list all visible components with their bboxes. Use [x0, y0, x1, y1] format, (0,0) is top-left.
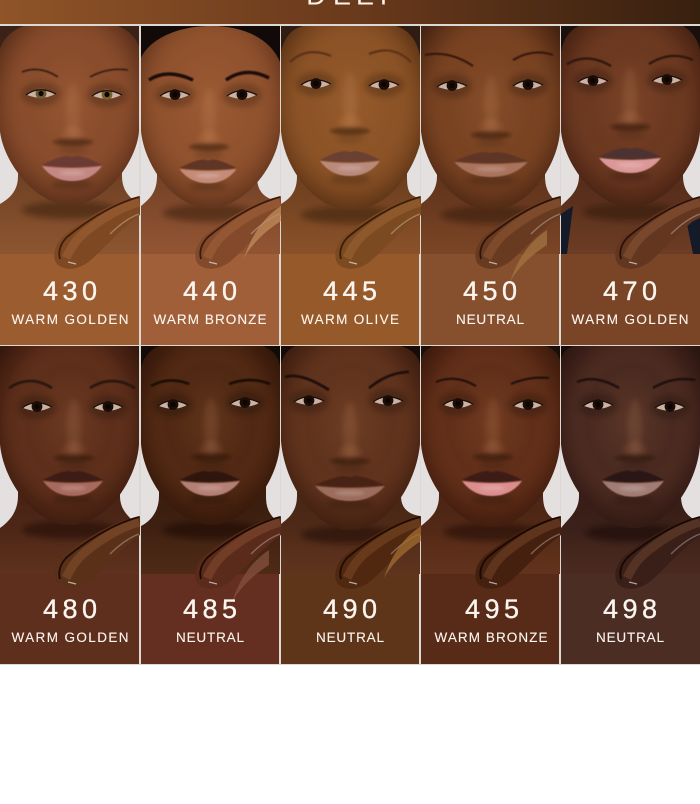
photo: model 430	[0, 26, 139, 254]
undertone label: WARM BRONZE	[434, 630, 548, 645]
photo: model 480	[0, 346, 139, 574]
panel: shade 440	[141, 26, 281, 345]
panel: shade 470	[561, 26, 700, 345]
panel: shade 445	[281, 26, 421, 345]
colour band	[421, 574, 559, 664]
colour band	[561, 254, 700, 345]
foundation swatch	[54, 196, 140, 269]
foundation swatch	[195, 196, 281, 269]
photo: model 490	[281, 346, 420, 574]
colour band	[0, 574, 139, 664]
panel: shade 430	[0, 26, 140, 345]
photo: model 445	[281, 26, 420, 254]
foundation swatch	[475, 516, 561, 589]
foundation swatch	[335, 516, 421, 589]
undertone label: WARM OLIVE	[301, 312, 399, 327]
undertone label: WARM GOLDEN	[12, 312, 128, 327]
undertone label: WARM BRONZE	[154, 312, 266, 327]
shade number: 480	[43, 594, 97, 624]
panel: shade 490	[281, 346, 421, 664]
foundation smear	[510, 230, 547, 282]
colour band	[281, 254, 419, 345]
header band	[0, 0, 700, 24]
foundation swatch	[615, 516, 700, 589]
panel: shade 498	[561, 346, 700, 664]
panel: shade 485	[141, 346, 281, 664]
panel: shade 450	[421, 26, 561, 345]
undertone label: NEUTRAL	[176, 630, 244, 645]
colour band	[141, 254, 279, 345]
foundation swatch	[54, 516, 140, 589]
foundation swatch	[475, 196, 561, 269]
photo: model 440	[141, 26, 280, 254]
shade number: 490	[323, 594, 377, 624]
shade number: 470	[603, 276, 657, 306]
foundation smear	[384, 526, 421, 578]
foundation smear	[244, 206, 281, 258]
photo: model 470	[561, 26, 700, 254]
foundation swatch	[615, 196, 700, 269]
shade number: 498	[603, 594, 657, 624]
photo: model 495	[421, 346, 560, 574]
colour band	[0, 254, 139, 345]
undertone label: NEUTRAL	[316, 630, 384, 645]
undertone label: WARM GOLDEN	[12, 630, 128, 645]
foundation swatch	[335, 196, 421, 269]
colour band	[141, 574, 279, 664]
photo: model 485	[141, 346, 280, 574]
shade number: 450	[463, 276, 517, 306]
undertone label: WARM GOLDEN	[572, 312, 688, 327]
shade number: 430	[43, 276, 97, 306]
panel: shade 480	[0, 346, 140, 664]
shade number: 440	[183, 276, 237, 306]
shade number: 445	[323, 276, 377, 306]
colour band	[281, 574, 419, 664]
colour band	[421, 254, 559, 345]
panel: shade 495	[421, 346, 561, 664]
shade number: 495	[465, 594, 519, 624]
undertone label: NEUTRAL	[456, 312, 524, 327]
colour band	[561, 574, 700, 664]
photo: model 498	[561, 346, 700, 574]
photo: model 450	[421, 26, 560, 254]
foundation swatch	[195, 516, 281, 589]
foundation smear	[232, 550, 269, 602]
undertone label: NEUTRAL	[596, 630, 664, 645]
shade number: 485	[183, 594, 237, 624]
